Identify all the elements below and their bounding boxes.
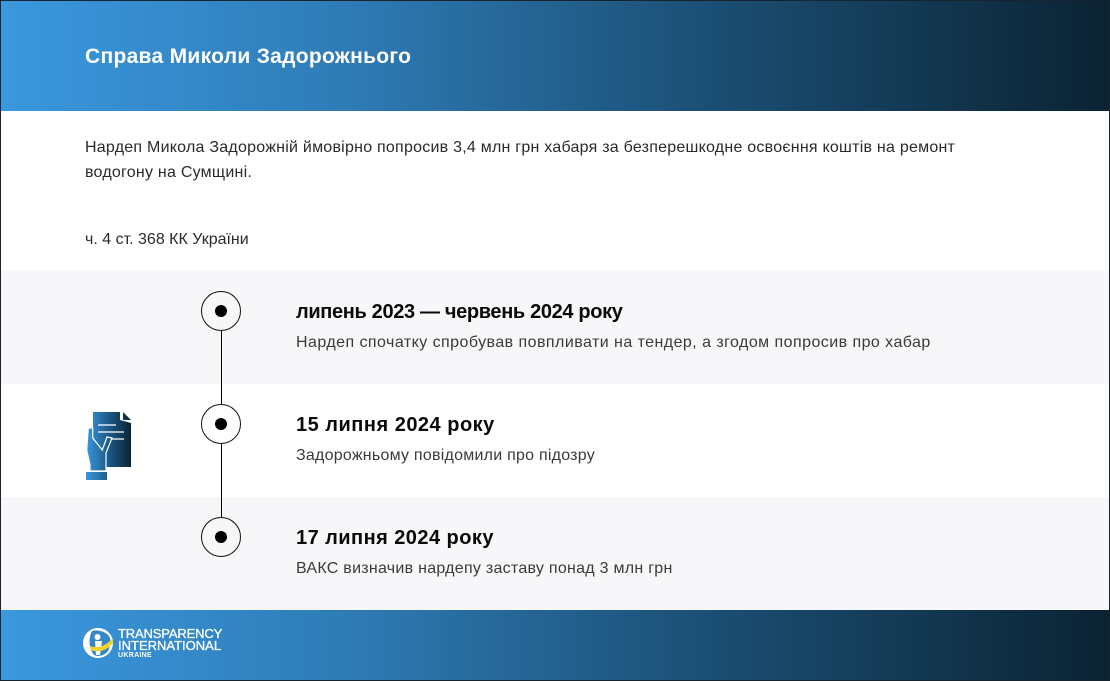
event 1 description: Нардеп спочатку спробував повпливати на тендер, а згодом попросив про хабар — [296, 334, 931, 351]
marker 2 — [202, 404, 240, 444]
logo subtitle: UKRAINE — [118, 652, 152, 659]
row 1 background — [1, 271, 1109, 384]
icon: hand holding document — [86, 412, 131, 480]
intro text — [85, 139, 955, 181]
logo wordmark: INTERNATIONAL — [118, 638, 221, 653]
row 3 background — [1, 497, 1109, 610]
logo wordmark — [118, 626, 222, 653]
intro text: водогону на Сумщині. — [85, 164, 252, 181]
header band — [1, 1, 1109, 111]
event 1 date: липень 2023 — червень 2024 року — [296, 301, 623, 323]
title: Справа Миколи Задорожнього — [85, 45, 411, 68]
marker 1 — [202, 292, 240, 330]
legal article: ч. 4 ст. 368 КК України — [85, 231, 249, 248]
event 2 description: Задорожньому повідомили про підозру — [296, 447, 595, 464]
event 2 date: 15 липня 2024 року — [296, 414, 495, 436]
event 1 — [296, 301, 931, 351]
event 3 date: 17 липня 2024 року — [296, 527, 494, 549]
event 2 — [296, 414, 595, 464]
intro text: Нардеп Микола Задорожній ймовірно попросив 3,4 млн грн хабаря за безперешкодне освоєння коштів на ремонт — [85, 139, 955, 156]
footer logo: Transparency International Ukraine — [83, 626, 222, 659]
logo emblem — [83, 628, 113, 658]
logo wordmark: TRANSPARENCY — [118, 626, 222, 641]
event 3 description: ВАКС визначив нардепу заставу понад 3 млн грн — [296, 560, 673, 577]
marker 3 — [202, 518, 240, 556]
footer band — [1, 610, 1109, 680]
timeline — [201, 291, 241, 557]
event 3 — [296, 527, 673, 577]
